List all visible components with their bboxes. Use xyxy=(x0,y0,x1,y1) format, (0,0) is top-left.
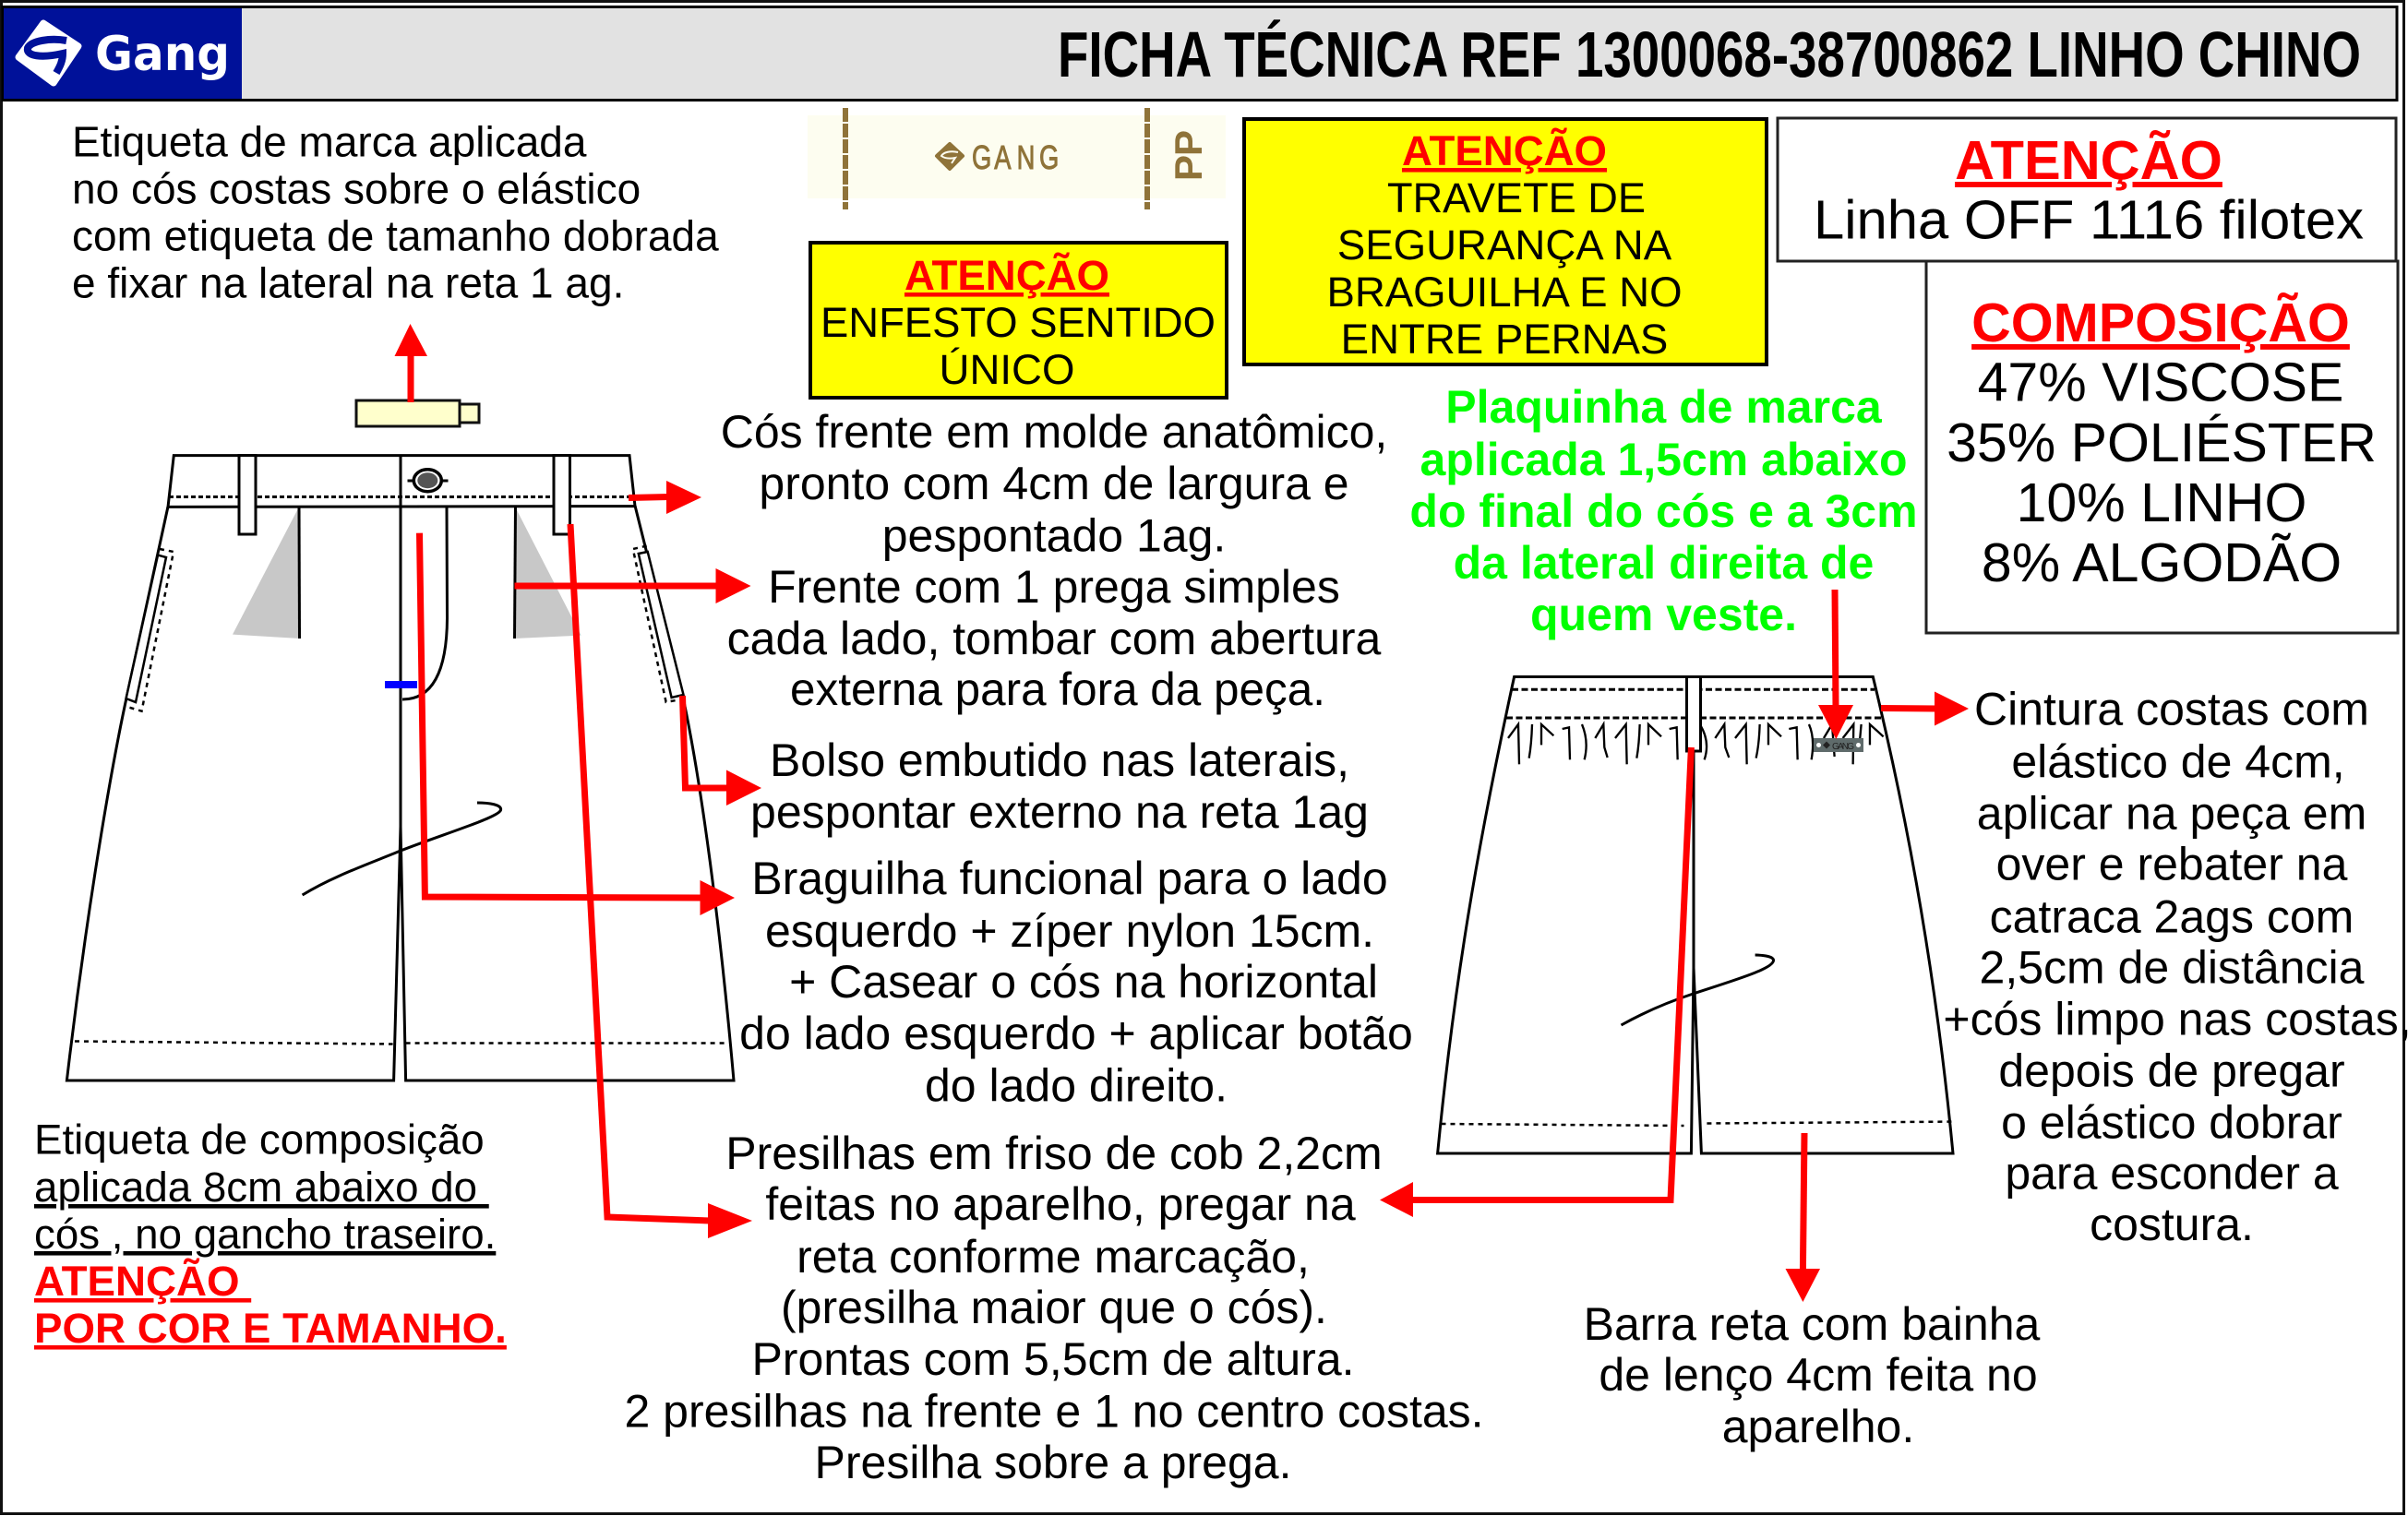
callout: enfesto sentido unico: ENFESTO SENTIDO xyxy=(821,299,1216,346)
text: cos frente: pronto com 4cm de largura e xyxy=(759,458,1349,509)
waistband xyxy=(168,456,635,507)
text: etiqueta de composicao: aplicada 8cm abaixo do xyxy=(34,1164,489,1211)
button xyxy=(408,470,449,492)
callout: travete de seguranca: TRAVETE DE xyxy=(1387,174,1646,221)
diagram: back shorts xyxy=(1438,677,1953,1153)
panel: composicao: 35% POLIÉSTER xyxy=(1947,412,2377,473)
text: cintura costas xyxy=(1943,683,2408,1250)
text: brand label instructions: e fixar na lateral na reta 1 ag. xyxy=(72,258,624,306)
arrow: brand plate xyxy=(1818,590,1853,739)
text: presilhas: reta conforme marcação, xyxy=(797,1231,1310,1283)
arrow: to brand label note xyxy=(395,324,427,402)
text: etiqueta de composicao: cós , no gancho traseiro. xyxy=(34,1211,496,1258)
brand label image: PP xyxy=(1167,130,1210,181)
arrow: belt loop back xyxy=(1380,747,1691,1217)
text: plaquinha de marca (green): aplicada 1,5cm abaixo xyxy=(1420,434,1908,485)
callout: travete de seguranca: SEGURANÇA NA xyxy=(1337,221,1672,269)
callout: travete de seguranca xyxy=(1244,119,1767,364)
text: plaquinha de marca (green): quem veste. xyxy=(1530,589,1797,640)
text: cintura costas: depois de pregar xyxy=(1998,1044,2345,1096)
tag on waistband xyxy=(356,400,479,426)
gathers xyxy=(1508,724,1884,764)
elastic stitching xyxy=(1442,689,1952,1126)
text: plaquinha de marca (green): do final do cós e a 3cm xyxy=(1409,485,1918,537)
panel: composicao: 8% ALGODÃO xyxy=(1982,532,2342,593)
diagram: front shorts xyxy=(66,456,734,1080)
text: presilhas xyxy=(624,1128,1484,1488)
text: cintura costas: Cintura costas com xyxy=(1974,683,2369,734)
text: bolso: pespontar externo na reta 1ag xyxy=(750,786,1369,838)
text: brand label instructions: com etiqueta de tamanho dobrada xyxy=(72,212,719,260)
text: etiqueta de composicao: Etiqueta de composição xyxy=(34,1116,485,1163)
text: barra reta xyxy=(1584,1298,2041,1452)
text: barra reta: Barra reta com bainha xyxy=(1584,1298,2041,1350)
belt loops xyxy=(239,456,570,534)
brand label image: GANG xyxy=(972,138,1059,176)
text: frente prega xyxy=(727,561,1382,715)
panel: composicao: 47% VISCOSE xyxy=(1978,352,2343,413)
text: cintura costas: +cós limpo nas costas, xyxy=(1943,993,2408,1044)
text: braguilha: Braguilha funcional para o lado xyxy=(751,853,1388,904)
pockets xyxy=(126,546,684,711)
text: presilhas: feitas no aparelho, pregar na xyxy=(765,1178,1356,1230)
text: cintura costas: over e rebater na xyxy=(1996,838,2348,889)
header bar xyxy=(3,7,2397,100)
text: cintura costas: aplicar na peça em xyxy=(1977,788,2366,840)
text: presilhas: (presilha maior que o cós). xyxy=(781,1282,1327,1333)
text: etiqueta de composicao: POR COR E TAMANHO. xyxy=(34,1305,507,1352)
arrow: elastic waist xyxy=(1881,692,1969,725)
text: bolso xyxy=(750,734,1369,838)
text: cintura costas: para esconder a xyxy=(2005,1148,2339,1200)
text: cos frente xyxy=(721,406,1387,561)
blue buttonhole mark xyxy=(385,681,417,688)
text: cintura costas: 2,5cm de distância xyxy=(1980,941,2365,993)
text: barra reta: de lenço 4cm feita no xyxy=(1599,1349,2038,1401)
text: brand label instructions: Etiqueta de marca aplicada xyxy=(72,118,587,166)
text: braguilha: esquerdo + zíper nylon 15cm. xyxy=(765,905,1374,957)
text: braguilha: do lado direito. xyxy=(925,1059,1228,1111)
text: plaquinha de marca (green) xyxy=(1409,381,1918,640)
text: cintura costas: o elástico dobrar xyxy=(2001,1096,2342,1148)
callout: enfesto sentido unico: ATENÇÃO xyxy=(904,252,1109,299)
fly stitching xyxy=(402,507,447,699)
crease line back xyxy=(1621,955,1774,1025)
panel: composicao xyxy=(1926,261,2398,633)
callout: enfesto sentido unico: ÚNICO xyxy=(940,346,1074,393)
text: cos frente: pespontado 1ag. xyxy=(882,509,1226,561)
text: brand label instructions xyxy=(72,118,719,306)
crease line xyxy=(303,803,501,895)
text: frente prega: cada lado, tombar com abertura xyxy=(727,613,1382,664)
text: barra reta: aparelho. xyxy=(1722,1401,1914,1452)
text: braguilha xyxy=(739,853,1413,1111)
shorts outline xyxy=(66,456,734,1080)
shorts outline back xyxy=(1438,677,1953,1153)
arrow: hem xyxy=(1785,1133,1820,1302)
text: cintura costas: catraca 2ags com xyxy=(1990,891,2354,943)
callout: travete de seguranca: ENTRE PERNAS xyxy=(1341,316,1668,363)
text: plaquinha de marca (green): Plaquinha de marca xyxy=(1445,381,1883,433)
callout: travete de seguranca: BRAGUILHA E NO xyxy=(1326,269,1683,316)
callout: enfesto sentido unico xyxy=(810,243,1227,398)
text: cintura costas: elástico de 4cm, xyxy=(2011,736,2345,788)
brand plate: GANG xyxy=(1832,742,1854,752)
text: cintura costas: costura. xyxy=(2090,1199,2254,1250)
belt loop back xyxy=(1687,677,1700,751)
callout: linha off: Linha OFF 1116 filotex xyxy=(1814,188,2364,251)
arrow: waistband xyxy=(629,481,701,514)
logo: Gang: Gang xyxy=(95,27,230,82)
text: braguilha: + Casear o cós na horizontal xyxy=(789,956,1378,1008)
arrow: pocket xyxy=(683,696,761,806)
text: frente prega: Frente com 1 prega simples xyxy=(768,561,1340,613)
brand plate xyxy=(1814,738,1863,752)
text: plaquinha de marca (green): da lateral direita de xyxy=(1454,537,1874,589)
logo: Gang xyxy=(4,8,242,99)
text: brand label instructions: no cós costas sobre o elástico xyxy=(72,164,641,212)
text: cos frente: Cós frente em molde anatômico, xyxy=(721,406,1387,458)
text: etiqueta de composicao xyxy=(34,1116,507,1352)
text: presilhas: Prontas com 5,5cm de altura. xyxy=(751,1333,1355,1385)
callout: linha off: ATENÇÃO xyxy=(1955,129,2222,191)
panel: composicao: COMPOSIÇÃO xyxy=(1971,292,2350,353)
text: bolso: Bolso embutido nas laterais, xyxy=(770,734,1349,786)
panel: composicao: 10% LINHO xyxy=(2017,472,2306,533)
arrow: belt loops front xyxy=(570,524,752,1238)
text: presilhas: 2 presilhas na frente e 1 no centro costas. xyxy=(624,1386,1484,1438)
callout: travete de seguranca: ATENÇÃO xyxy=(1402,127,1607,174)
text: braguilha: do lado esquerdo + aplicar botão xyxy=(739,1008,1413,1059)
text: etiqueta de composicao: ATENÇÃO xyxy=(34,1258,251,1305)
brand label image xyxy=(808,108,1226,209)
text: presilhas: Presilha sobre a prega. xyxy=(815,1437,1291,1488)
arrow: pleat xyxy=(515,568,751,603)
arrow: fly xyxy=(419,533,735,915)
text: presilhas: Presilhas em friso de cob 2,2cm xyxy=(725,1128,1383,1179)
callout: linha off xyxy=(1778,118,2396,261)
text: frente prega: externa para fora da peça. xyxy=(790,663,1325,715)
grey pleats xyxy=(233,507,581,639)
